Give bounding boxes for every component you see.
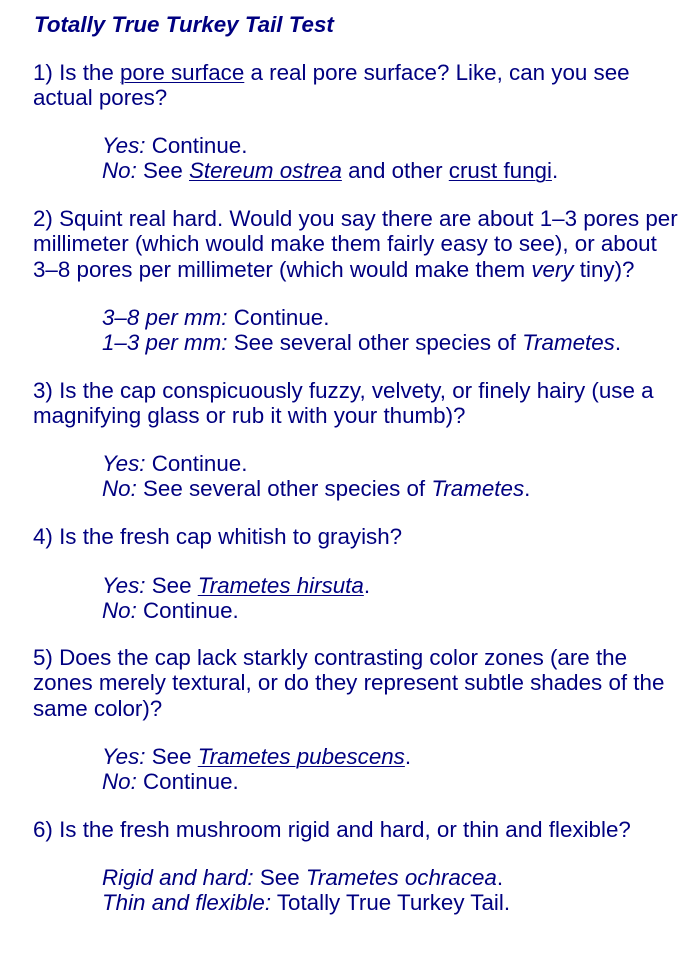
answers 1 xyxy=(102,133,558,183)
question 1 xyxy=(33,60,630,110)
question 2: millimeter (which would make them fairly easy to see), or about xyxy=(33,231,657,256)
question 5: zones merely textural, or do they represent subtle shades of the xyxy=(33,670,664,695)
question 1: 1) Is the pore surface a real pore surface? Like, can you see xyxy=(33,60,630,85)
title: Totally True Turkey Tail Test xyxy=(34,12,334,37)
question 3: 3) Is the cap conspicuously fuzzy, velvety, or finely hairy (use a xyxy=(33,378,654,403)
answers 4: No: Continue. xyxy=(102,598,239,623)
question 3: magnifying glass or rub it with your thumb)? xyxy=(33,403,465,428)
question 2: 3–8 pores per millimeter (which would make them very tiny)? xyxy=(33,257,634,282)
answers 1: Yes: Continue. xyxy=(102,133,247,158)
answers 4: Yes: See Trametes hirsuta. xyxy=(102,573,370,598)
question 5 xyxy=(33,645,664,721)
question 5: 5) Does the cap lack starkly contrasting color zones (are the xyxy=(33,645,627,670)
answers 4 xyxy=(102,573,370,623)
answers 3: Yes: Continue. xyxy=(102,451,247,476)
answers 2 xyxy=(102,305,621,355)
question 6: 6) Is the fresh mushroom rigid and hard, or thin and flexible? xyxy=(33,817,631,842)
question 5: same color)? xyxy=(33,696,162,721)
answers 6: Rigid and hard: See Trametes ochracea. xyxy=(102,865,503,890)
answers 1: No: See Stereum ostrea and other crust fungi. xyxy=(102,158,558,183)
question 2 xyxy=(33,206,678,282)
question 3 xyxy=(33,378,654,428)
answers 2: 1–3 per mm: See several other species of Trametes. xyxy=(102,330,621,355)
answers 2: 3–8 per mm: Continue. xyxy=(102,305,329,330)
question 2: 2) Squint real hard. Would you say there are about 1–3 pores per xyxy=(33,206,678,231)
question 4: 4) Is the fresh cap whitish to grayish? xyxy=(33,524,402,549)
answers 3: No: See several other species of Trametes. xyxy=(102,476,530,501)
answers 5 xyxy=(102,744,411,794)
answers 6 xyxy=(102,865,510,915)
answers 5: Yes: See Trametes pubescens. xyxy=(102,744,411,769)
answers 5: No: Continue. xyxy=(102,769,239,794)
answers 6: Thin and flexible: Totally True Turkey Tail. xyxy=(102,890,510,915)
question 1: actual pores? xyxy=(33,85,167,110)
answers 3 xyxy=(102,451,530,501)
